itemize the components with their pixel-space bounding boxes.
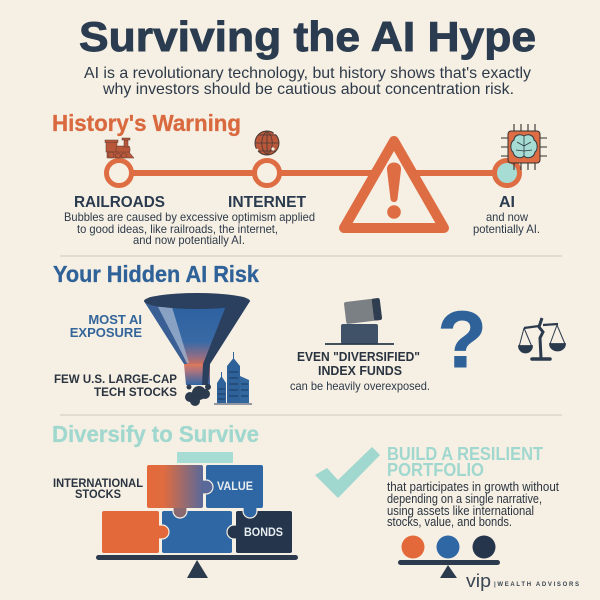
puzzle: gradient piece [147, 465, 203, 508]
text: bubbles explanation: and now potentially AI. [133, 233, 245, 247]
panel: your hidden AI risk [53, 261, 565, 406]
text: AI note: potentially AI. [473, 222, 540, 236]
title: Surviving the AI Hype [79, 13, 536, 60]
text: few U.S. large-cap tech stocks: FEW U.S. LARGE-CAP [54, 372, 177, 386]
text: index funds: INDEX FUNDS [318, 364, 402, 378]
icon: balanced circles [398, 536, 500, 578]
label: bonds: BONDS [244, 527, 283, 539]
icon: AI chip with brain [501, 124, 547, 170]
puzzle: value piece [203, 465, 263, 508]
label: value: VALUE [217, 481, 253, 493]
heading: history's warning: History's Warning [52, 110, 241, 136]
text: resilient portfolio body: depending on a single narrative, [387, 492, 542, 506]
text: resilient portfolio body: that participates in growth without [387, 480, 559, 494]
text: most AI exposure [70, 312, 142, 340]
puzzle: blue piece [159, 508, 232, 553]
text: resilient portfolio body: using assets like international [387, 504, 534, 518]
icon: warning triangle [344, 141, 444, 228]
text: international stocks: STOCKS [75, 487, 121, 501]
panel: history's warning [52, 110, 547, 247]
puzzle: orange piece [102, 511, 159, 553]
label: internet: INTERNET [228, 194, 306, 211]
text: AI note: and now [486, 210, 528, 224]
heading: build a resilient portfolio [387, 444, 543, 480]
text: few U.S. large-cap tech stocks [54, 372, 177, 399]
timeline line [119, 170, 507, 176]
icon: question mark: ? [438, 295, 486, 384]
text: few U.S. large-cap tech stocks: TECH STOCKS [94, 385, 177, 399]
text: most AI exposure: MOST AI [88, 312, 142, 327]
logo: VIP wealth advisors: vip [466, 571, 491, 591]
puzzle: bonds piece [227, 508, 292, 553]
text: international stocks [53, 476, 143, 501]
blobs [185, 384, 211, 406]
logo: VIP wealth advisors [466, 571, 579, 591]
heading: your hidden AI risk: Your Hidden AI Risk [53, 261, 259, 287]
icon: skyscrapers [214, 352, 252, 404]
icon: tilted blocks [325, 298, 394, 344]
panel: diversify to survive [52, 421, 559, 578]
icon: checkmark [315, 447, 380, 498]
text: AI note [473, 210, 540, 236]
subtitle [84, 65, 531, 98]
text: international stocks: INTERNATIONAL [53, 476, 143, 490]
text: index funds [290, 350, 430, 393]
heading: diversify to survive: Diversify to Survive [52, 421, 259, 447]
text: bubbles explanation: Bubbles are caused by excessive optimism applied [64, 210, 315, 224]
icon: broken scales [519, 318, 565, 359]
icon: globe [255, 131, 279, 155]
subtitle: why investors should be cautious about concentration risk. [102, 81, 514, 98]
text: most AI exposure: EXPOSURE [70, 325, 142, 340]
heading: build a resilient portfolio: PORTFOLIO [387, 460, 484, 480]
icon: funnel [144, 293, 250, 406]
icon: railroad node [106, 160, 132, 186]
label: railroads: RAILROADS [74, 194, 165, 211]
icon: train [105, 138, 134, 158]
text: index funds: can be heavily overexposed. [290, 379, 430, 393]
text: bubbles explanation [64, 210, 315, 247]
icon: AI node [494, 160, 520, 186]
logo: VIP wealth advisors: |WEALTH ADVISORS [494, 582, 579, 588]
puzzle: teal block [177, 452, 233, 463]
text: index funds: EVEN "DIVERSIFIED" [297, 350, 420, 364]
icon: internet node [254, 160, 280, 186]
label: AI: AI [499, 194, 515, 211]
subtitle: AI is a revolutionary technology, but history shows that's exactly [84, 65, 531, 82]
heading: build a resilient portfolio: BUILD A RESILIENT [387, 444, 543, 464]
icon: balance beam [96, 555, 298, 578]
text: bubbles explanation: to good ideas, like railroads, the internet, [77, 222, 278, 236]
text: resilient portfolio body [387, 480, 559, 529]
text: resilient portfolio body: stocks, value, and bonds. [387, 515, 512, 529]
